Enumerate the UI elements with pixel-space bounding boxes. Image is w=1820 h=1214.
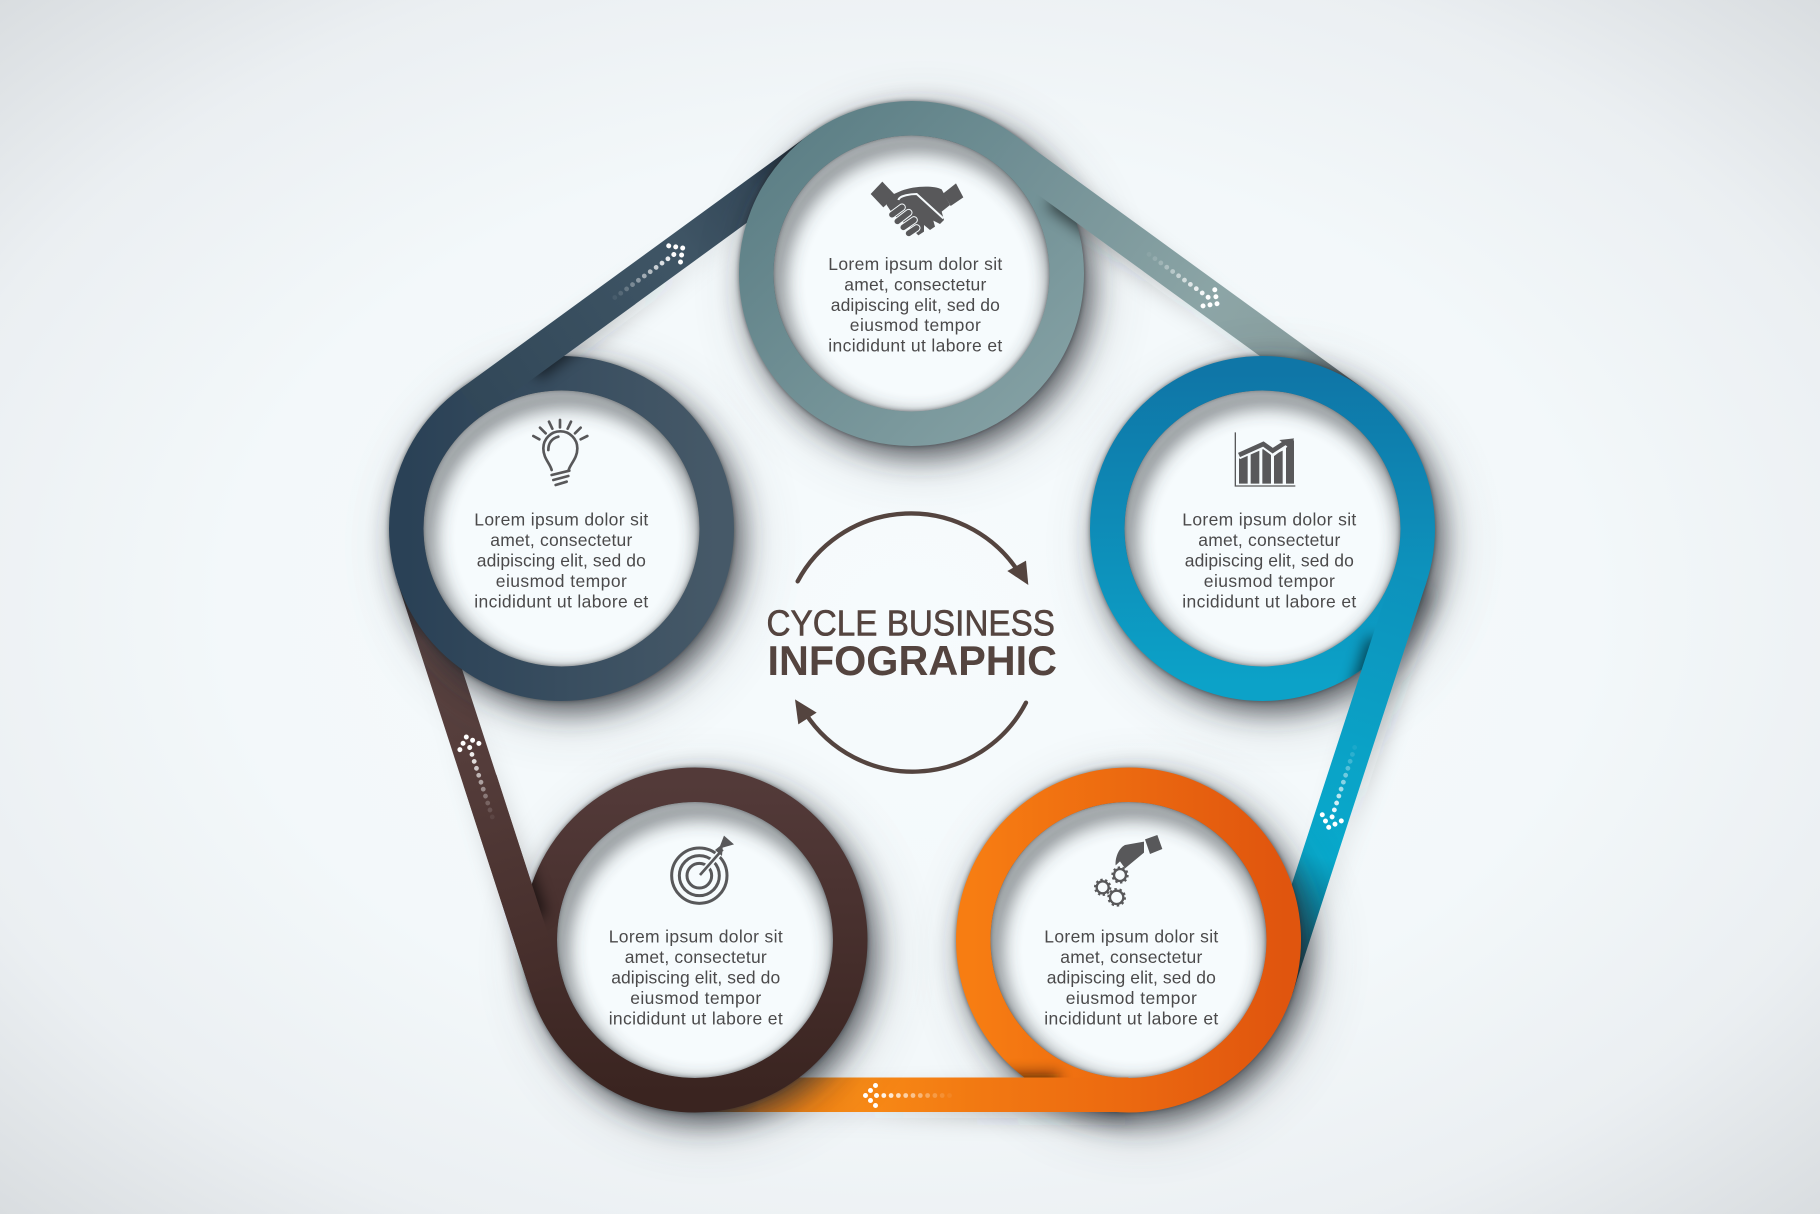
ribbon strip: top to blue	[1003, 148, 1354, 403]
icon: light bulb	[533, 420, 587, 485]
text: blue circle: eiusmod tempor	[1204, 571, 1335, 591]
text: top circle: incididunt ut labore et	[828, 336, 1002, 356]
dotted arrow: teal strip	[1140, 243, 1226, 315]
dotted arrow: orange strip	[863, 1083, 952, 1108]
title	[766, 603, 1057, 684]
text: orange circle	[1044, 927, 1218, 1028]
shadow: navy strip	[476, 157, 826, 412]
text: navy circle: incididunt ut labore et	[474, 591, 648, 611]
icon: hand with gears	[1095, 835, 1162, 906]
ribbon strip: brown to navy (near end, over brown ring)	[480, 777, 547, 988]
text: orange circle: incididunt ut labore et	[1044, 1008, 1218, 1028]
text: top circle: Lorem ipsum dolor sit	[828, 254, 1002, 274]
shadow: blue strip	[1284, 585, 1418, 997]
dotted arrow: navy strip	[606, 236, 692, 309]
icon: handshake	[871, 182, 963, 235]
text: navy circle: adipiscing elit, sed do	[477, 550, 646, 570]
text: brown circle: Lorem ipsum dolor sit	[609, 927, 783, 947]
shadow: teal strip	[1000, 156, 1351, 411]
icon: bar chart	[1235, 432, 1295, 486]
text: top circle: amet, consectetur	[844, 274, 986, 294]
ring: brown	[540, 785, 862, 1111]
text: brown circle	[609, 927, 783, 1028]
shadow: orange strip	[695, 1088, 1132, 1118]
text: brown circle: adipiscing elit, sed do	[611, 968, 780, 988]
text: navy circle: Lorem ipsum dolor sit	[474, 510, 648, 530]
ribbon strip: brown to navy (far end, passes under navy ring)	[414, 576, 547, 988]
text: blue circle: amet, consectetur	[1198, 530, 1340, 550]
ring: top teal	[756, 118, 1079, 445]
ring: orange	[973, 785, 1296, 1111]
text: blue circle: adipiscing elit, sed do	[1185, 550, 1354, 570]
text: blue circle: Lorem ipsum dolor sit	[1182, 510, 1356, 530]
text: orange circle: Lorem ipsum dolor sit	[1044, 927, 1218, 947]
text: orange circle: amet, consectetur	[1060, 947, 1202, 967]
arrow: centre cycle top	[798, 513, 1028, 585]
ribbon strip: orange to brown	[695, 1091, 1128, 1095]
text: brown circle: eiusmod tempor	[630, 988, 761, 1008]
ring: navy	[406, 373, 729, 700]
text: top circle: eiusmod tempor	[850, 315, 981, 335]
ring: blue	[1107, 373, 1430, 700]
title: INFOGRAPHIC	[768, 637, 1057, 684]
dotted arrow: blue strip	[1316, 741, 1367, 834]
text: top circle	[828, 254, 1002, 356]
text: blue circle: incididunt ut labore et	[1182, 591, 1356, 611]
text: navy circle	[474, 510, 648, 611]
text: navy circle: eiusmod tempor	[496, 571, 627, 591]
title: CYCLE BUSINESS	[766, 603, 1055, 644]
dotted arrow: brown strip	[454, 731, 505, 823]
icon: target with dart	[672, 836, 734, 903]
shadow: brown strip	[418, 582, 551, 994]
text: brown circle: incididunt ut labore et	[609, 1008, 783, 1028]
text: orange circle: eiusmod tempor	[1066, 988, 1197, 1008]
text: top circle: adipiscing elit, sed do	[831, 295, 1000, 315]
text: blue circle	[1182, 510, 1356, 611]
text: orange circle: adipiscing elit, sed do	[1047, 968, 1216, 988]
text: navy circle: amet, consectetur	[490, 530, 632, 550]
ribbon strip: blue to orange	[1276, 577, 1410, 988]
ribbon strip: navy to top	[470, 148, 820, 403]
text: brown circle: amet, consectetur	[625, 947, 767, 967]
arrow: centre cycle bottom	[795, 699, 1026, 772]
